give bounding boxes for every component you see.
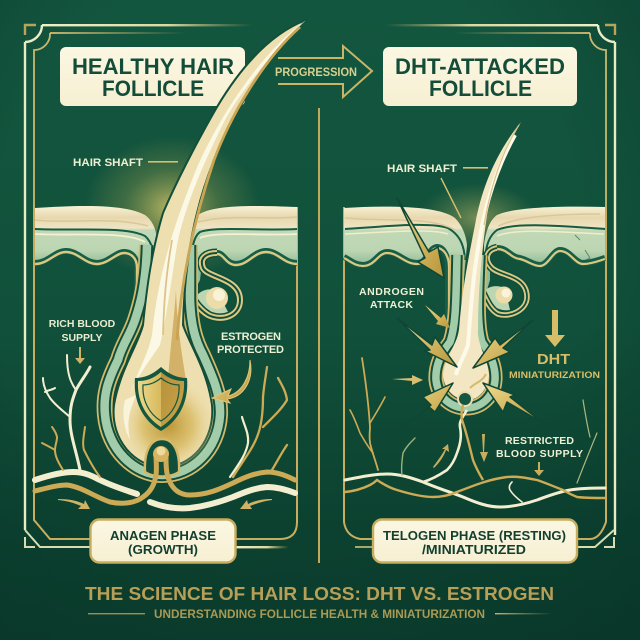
arrow: lower right spike [483, 383, 543, 423]
label: restricted blood supply: BLOOD SUPPLY [496, 448, 583, 460]
arrows: blood flow [58, 347, 272, 509]
glow behind hair [84, 136, 260, 280]
label: DHT miniaturization [509, 351, 600, 381]
sebaceous gland [190, 253, 240, 318]
dermal papilla [153, 446, 169, 462]
progression arrow [275, 46, 372, 97]
gold wavy border right [217, 251, 297, 265]
label: hair shaft: HAIR SHAFT [387, 163, 457, 175]
arrow: large upper [397, 198, 444, 278]
heading: healthy hair follicle [60, 47, 245, 106]
blood vessels right [345, 358, 605, 507]
arrow: estrogen protection [212, 360, 251, 403]
papilla ring [145, 439, 179, 476]
subtitle: UNDERSTANDING FOLLICLE HEALTH & MINIATURIZATION [154, 607, 485, 621]
heading: DHT-attacked follicle: DHT-ATTACKED [395, 54, 565, 79]
arrows: androgen attack [396, 198, 543, 433]
gold wavy border left [344, 247, 449, 340]
label box: anagen phase: ANAGEN PHASE [110, 528, 216, 543]
follicle sheath [436, 255, 495, 408]
glow behind hair [418, 183, 538, 253]
arrows: restricted blood [433, 434, 544, 476]
arrow: DHT down [545, 310, 565, 347]
heading: DHT-attacked follicle [383, 47, 577, 106]
label: rich blood supply: RICH BLOOD [49, 318, 116, 330]
follicle sheath [105, 245, 220, 475]
label: hair shaft [73, 157, 178, 169]
arrow: lower left spike [396, 383, 453, 433]
panel: DHT-attacked follicle [344, 24, 615, 562]
main title: THE SCIENCE OF HAIR LOSS: DHT VS. ESTROGEN [85, 584, 554, 604]
heading: healthy hair follicle: FOLLICLE [102, 76, 204, 101]
heading: healthy hair follicle: HEALTHY HAIR [72, 54, 234, 79]
label: restricted blood supply: RESTRICTED [505, 435, 574, 447]
label: DHT miniaturization: MINIATURIZATION [509, 370, 600, 381]
arrow: upper right spike [473, 320, 533, 368]
label box: anagen phase: (GROWTH) [128, 542, 198, 557]
label box: telogen phase: /MINIATURIZED [422, 542, 526, 557]
label: estrogen protected: ESTROGEN [221, 331, 281, 343]
label: DHT miniaturization: DHT [537, 351, 570, 368]
label: hair shaft [387, 163, 488, 218]
label box: telogen phase: TELOGEN PHASE (RESTING) [383, 528, 566, 543]
frame: left panel border [25, 24, 297, 548]
label: androgen attack: ATTACK [370, 299, 413, 311]
dermal papilla and stem [423, 392, 483, 482]
label: androgen attack: ANDROGEN [359, 286, 424, 298]
label: estrogen protected: PROTECTED [217, 344, 284, 356]
panel: healthy hair follicle [25, 20, 306, 562]
icon: shield [135, 367, 187, 431]
label box: telogen phase [373, 520, 577, 562]
heading: DHT-attacked follicle: FOLLICLE [429, 76, 532, 101]
label box: anagen phase [90, 520, 236, 562]
skin layers [344, 207, 605, 310]
progression arrow: PROGRESSION [275, 67, 357, 79]
sebaceous gland [482, 248, 527, 315]
frame: right panel border [344, 24, 615, 548]
hair shaft and bulb [114, 20, 306, 471]
gold wavy border right [497, 248, 605, 266]
hair shaft and bulb [443, 122, 521, 400]
center divider [318, 108, 320, 563]
arrow: small horizontal [392, 375, 423, 385]
label: rich blood supply: SUPPLY [61, 332, 103, 344]
arrow: medium upper [425, 305, 450, 328]
arrow: upper left spike [397, 318, 457, 367]
gold wavy border left [35, 251, 137, 330]
blood vessels left [35, 355, 295, 508]
skin layers [35, 206, 297, 300]
label: hair shaft: HAIR SHAFT [73, 157, 143, 169]
